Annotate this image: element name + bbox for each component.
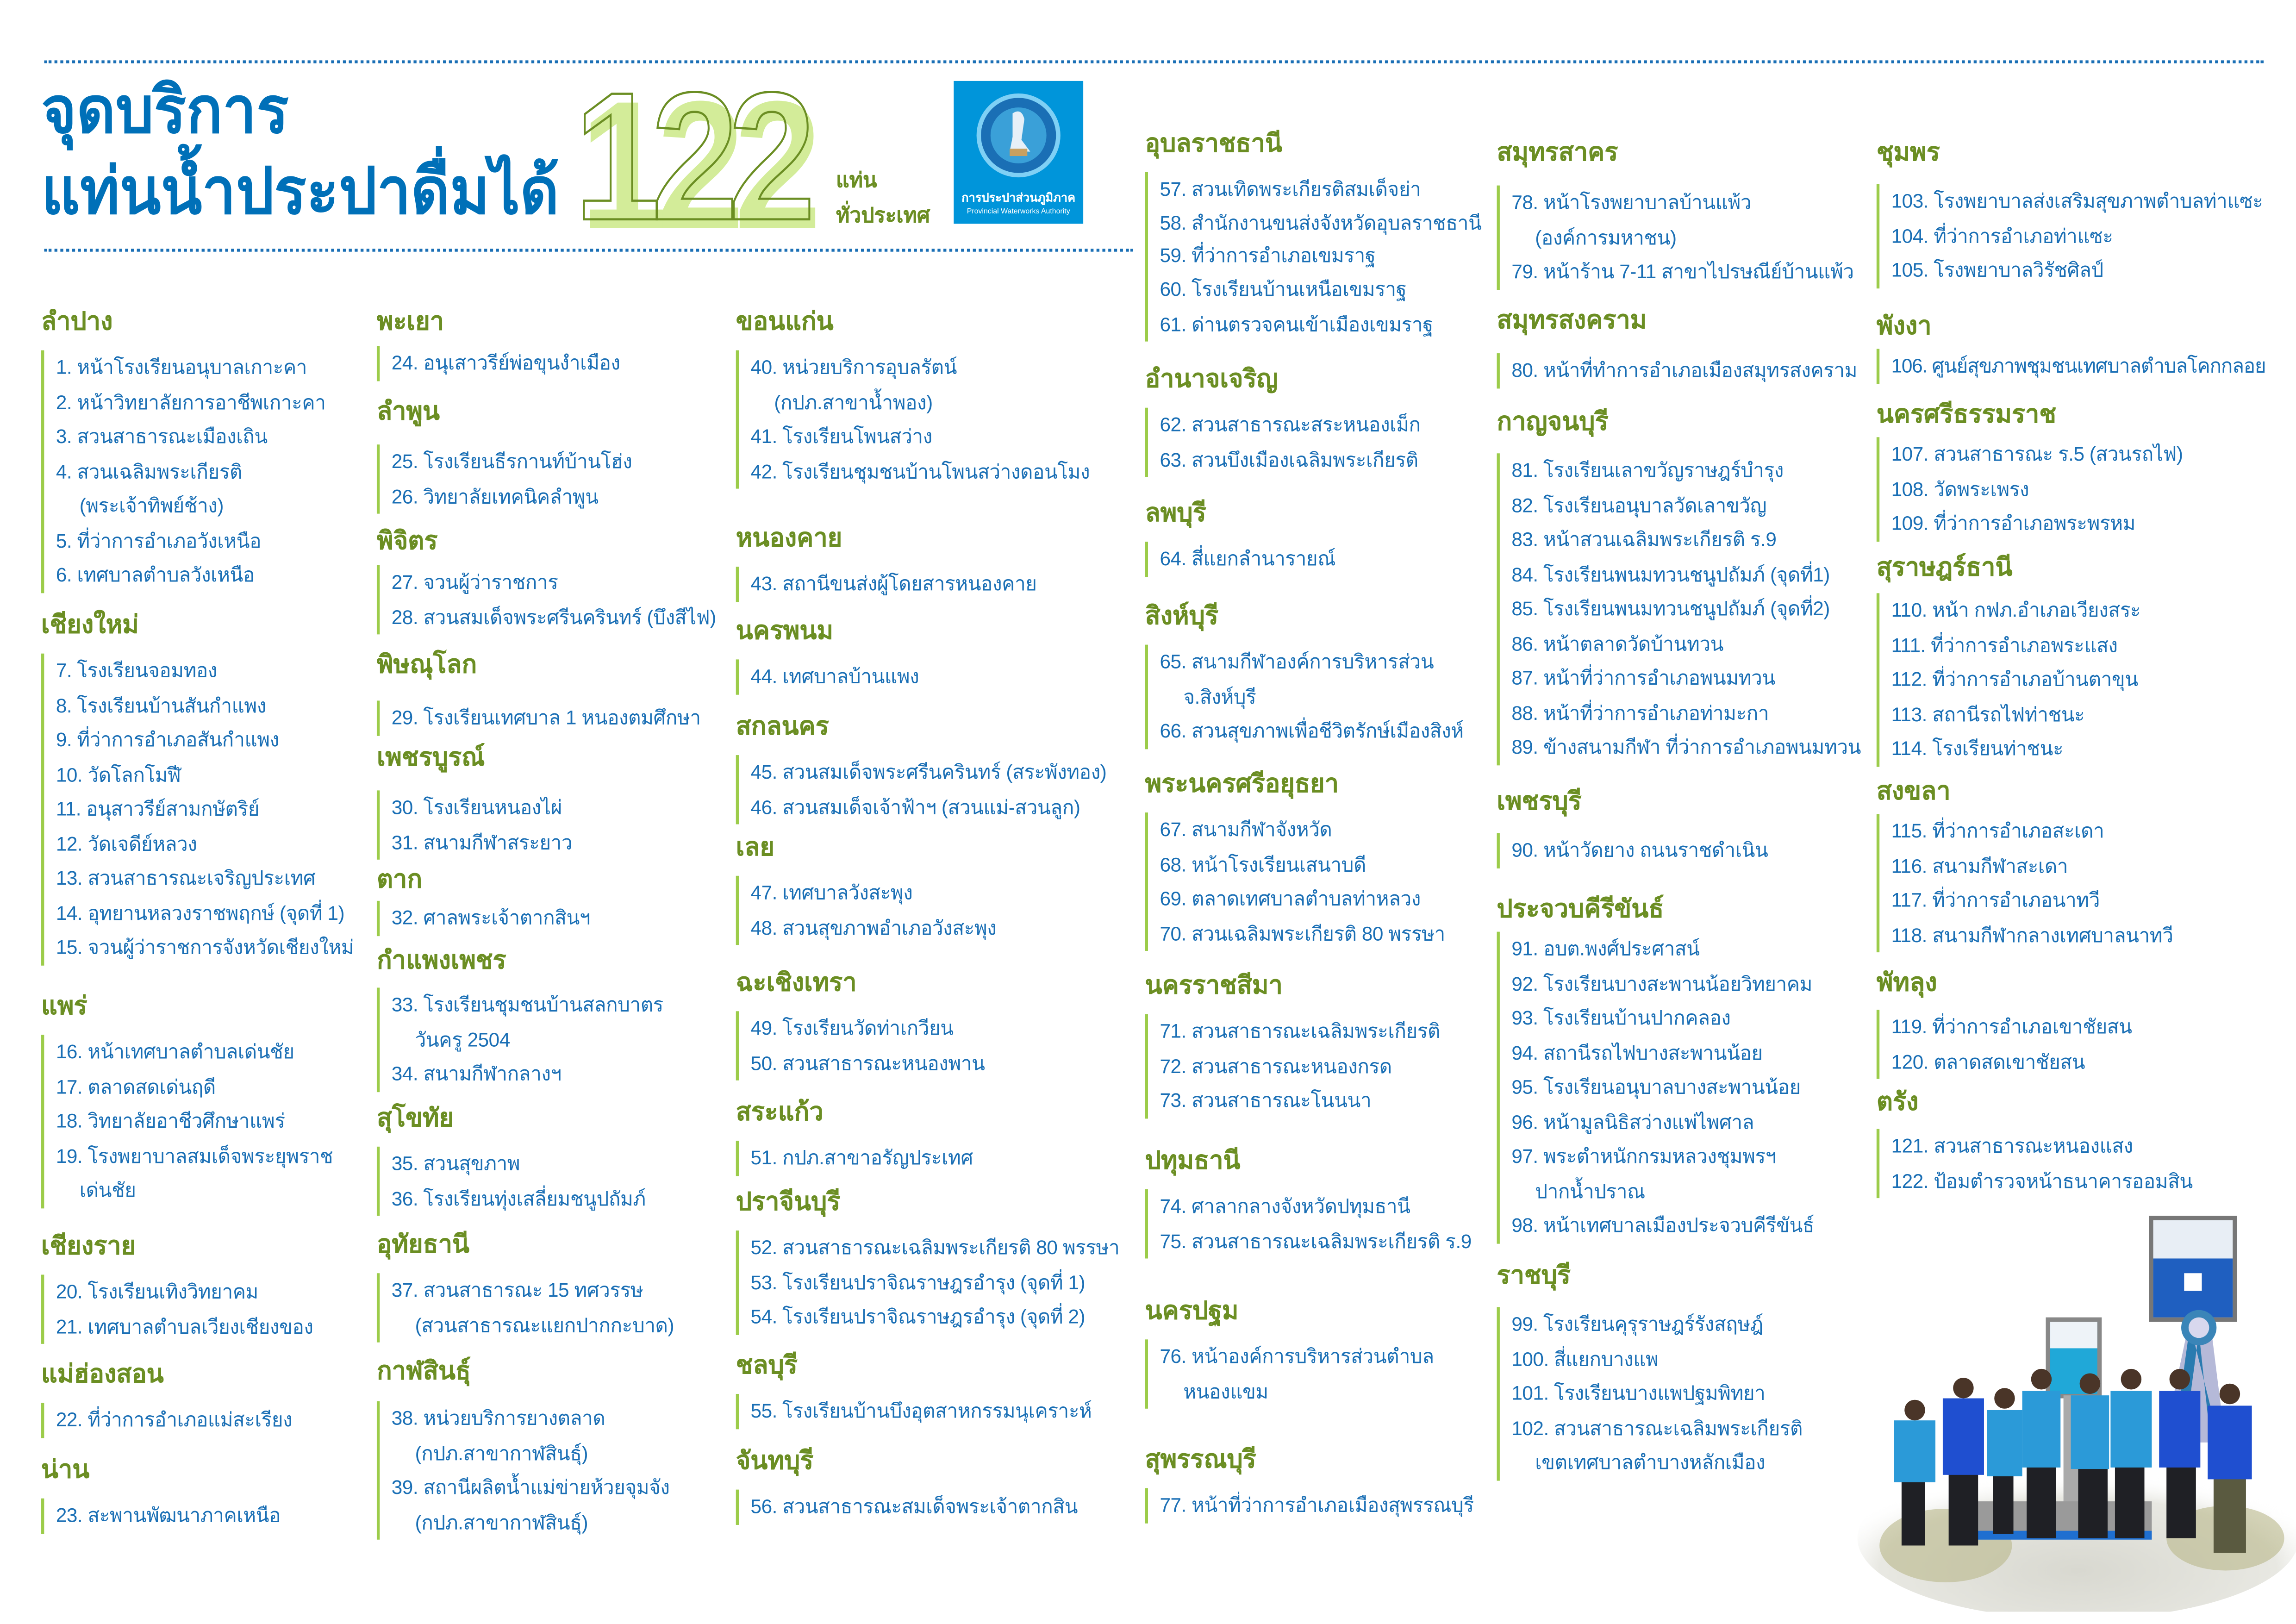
section: Samut Sakhon: [1497, 137, 1854, 289]
section: Amnat Charoen: อำนาจเจริญ: [1145, 365, 1278, 393]
section: Chanthaburi: [736, 1445, 1078, 1524]
section: Ayutthaya: 68. หน้าโรงเรียนเสนาบดี: [1160, 853, 1366, 875]
section: Trang: ตรัง: [1877, 1088, 1918, 1116]
section: Prachuap Khiri Khan: ประจวบคีรีขันธ์: [1497, 895, 1664, 923]
section: Lamphun: 25. โรงเรียนธีรกานท์บ้านโฮ่ง: [392, 450, 632, 473]
section: Nakhon Pathom: 76. หน้าองค์การบริหารส่วนตำบล: [1160, 1345, 1434, 1368]
section: Phang Nga: พังงา: [1877, 312, 1932, 340]
section: Suphan Buri: 77. หน้าที่ว่าการอำเภอเมืองสุพรรณบุรี: [1160, 1494, 1474, 1516]
section: Nakhon Si Thammarat: [1877, 399, 2183, 541]
section: Nan: 23. สะพานพัฒนาภาคเหนือ: [56, 1504, 281, 1526]
section: Chiang Rai: [41, 1230, 313, 1344]
section: Khon Kaen: (กปภ.สาขาน้ำพอง): [774, 391, 933, 413]
section: Phichit: 28. สวนสมเด็จพระศรีนครินทร์ (บึงสีไฟ): [392, 606, 716, 628]
section: Sing Buri: 66. สวนสุขภาพเพื่อชีวิตรักษ์เมืองสิงห์: [1160, 720, 1464, 742]
logo: PWA: การประปาส่วนภูมิภาค: [961, 191, 1075, 205]
section: Nakhon Si Thammarat: 109. ที่ว่าการอำเภอพระพรหม: [1891, 512, 2135, 534]
section: Kanchanaburi: 87. หน้าที่ว่าการอำเภอพนมทวน: [1511, 667, 1775, 689]
section: Samut Songkhram: สมุทรสงคราม: [1497, 306, 1647, 334]
section: Kalasin: 38. หน่วยบริการยางตลาด: [392, 1407, 605, 1429]
section: Chumphon: 104. ที่ว่าการอำเภอท่าแซะ: [1891, 225, 2113, 247]
section: Phrae: 16. หน้าเทศบาลตำบลเด่นชัย: [56, 1041, 294, 1063]
section: Loei: 47. เทศบาลวังสะพุง: [751, 882, 912, 904]
section: Chiang Mai: 11. อนุสาวรีย์สามกษัตริย์: [56, 798, 259, 820]
section: Nong Khai: หนองคาย: [736, 524, 842, 552]
section: Phitsanulok: [377, 649, 701, 735]
section: Chon Buri: [736, 1350, 1092, 1429]
section: Prachuap Khiri Khan: 97. พระตำหนักกรมหลวงชุมพรฯ: [1511, 1145, 1776, 1167]
section: Kamphaeng Phet: วันครู 2504: [415, 1028, 510, 1050]
section: Nakhon Ratchasima: 72. สวนสาธารณะหนองกรด: [1160, 1055, 1392, 1077]
section: Khon Kaen: 42. โรงเรียนชุมชนบ้านโพนสว่างดอนโมง: [751, 460, 1090, 482]
section: Lampang: 1. หน้าโรงเรียนอนุบาลเกาะคา: [56, 356, 307, 378]
section: Sing Buri: [1145, 600, 1464, 749]
section: Surat Thani: [1877, 552, 2140, 766]
section: Chiang Mai: เชียงใหม่: [41, 611, 139, 639]
section: Sukhothai: [377, 1102, 646, 1216]
section: Sakon Nakhon: สกลนคร: [736, 712, 829, 740]
section: Prachuap Khiri Khan: ปากน้ำปราณ: [1535, 1180, 1645, 1202]
section: Pathum Thani: ปทุมธานี: [1145, 1147, 1241, 1174]
section: Sa Kaeo: สระแก้ว: [736, 1098, 824, 1126]
section: Nakhon Ratchasima: 71. สวนสาธารณะเฉลิมพระเกียรติ: [1160, 1020, 1440, 1042]
section: Prachuap Khiri Khan: 93. โรงเรียนบ้านปากคลอง: [1511, 1007, 1731, 1029]
section: Nakhon Si Thammarat: 107. สวนสาธารณะ ร.5 (สวนรถไฟ): [1891, 443, 2183, 465]
section: Phatthalung: 119. ที่ว่าการอำเภอเขาชัยสน: [1891, 1016, 2132, 1038]
section: Chachoengsao: [736, 967, 985, 1081]
section: Kanchanaburi: 81. โรงเรียนเลาขวัญราษฎร์บำรุง: [1511, 459, 1784, 481]
section: Ubon Ratchathani: 58. สำนักงานขนส่งจังหวัดอุบลราชธานี: [1160, 211, 1481, 233]
section: Phetchabun: 30. โรงเรียนหนองไผ่: [392, 796, 562, 818]
section: Kalasin: กาฬสินธุ์: [377, 1357, 471, 1385]
section: Phrae: 17. ตลาดสดเด่นฤดี: [56, 1075, 216, 1097]
section: Phichit: 27. จวนผู้ว่าราชการ: [392, 571, 558, 593]
section: Surat Thani: 111. ที่ว่าการอำเภอพระแสง: [1891, 634, 2118, 656]
section: Phang Nga: [1877, 311, 2265, 383]
section: Sukhothai: สุโขทัย: [377, 1104, 454, 1132]
section: Loei: เลย: [736, 833, 774, 861]
section: Lop Buri: 64. สี่แยกลำนารายณ์: [1160, 548, 1335, 569]
section: Ratchaburi: 101. โรงเรียนบางแพปฐมพิทยา: [1511, 1382, 1765, 1404]
section: Chumphon: ชุมพร: [1877, 138, 1940, 166]
section: Mae Hong Son: แม่ฮ่องสอน: [41, 1360, 164, 1388]
section: Prachin Buri: ปราจีนบุรี: [736, 1188, 840, 1216]
section: Kanchanaburi: 82. โรงเรียนอนุบาลวัดเลาขวัญ: [1511, 494, 1766, 516]
section: Kamphaeng Phet: [377, 945, 663, 1092]
title: [41, 74, 534, 243]
section: Amnat Charoen: 63. สวนบึงเมืองเฉลิมพระเกียรติ: [1160, 448, 1418, 470]
section: Lampang: ลำปาง: [41, 308, 113, 336]
section: Phrae: 19. โรงพยาบาลสมเด็จพระยุพราช: [56, 1144, 333, 1167]
section: Ubon Ratchathani: 57. สวนเทิดพระเกียรติสมเด็จย่า: [1160, 178, 1421, 200]
section: Nakhon Ratchasima: นครราชสีมา: [1145, 971, 1283, 999]
section: Ubon Ratchathani: 60. โรงเรียนบ้านเหนือเขมราฐ: [1160, 278, 1406, 300]
section: Lampang: [41, 306, 326, 593]
section: Ratchaburi: 102. สวนสาธารณะเฉลิมพระเกียรติ: [1511, 1417, 1803, 1439]
section: Nakhon Phanom: [736, 615, 919, 694]
section: Phatthalung: [1877, 967, 2132, 1079]
section: Chiang Rai: 21. เทศบาลตำบลเวียงเชียงของ: [56, 1315, 313, 1337]
title: จุดบริการ: [41, 75, 289, 147]
subtitle: units nationwide: [836, 162, 946, 236]
section: Chon Buri: ชลบุรี: [736, 1351, 798, 1379]
section: Lampang: 6. เทศบาลตำบลวังเหนือ: [56, 564, 255, 586]
section: Uthai Thani: 37. สวนสาธารณะ 15 ทศวรรษ: [392, 1279, 643, 1301]
section: Sing Buri: 65. สนามกีฬาองค์การบริหารส่วน: [1160, 650, 1434, 673]
section: Surat Thani: 113. สถานีรถไฟท่าชนะ: [1891, 703, 2084, 725]
section: Ratchaburi: เขตเทศบาลตำบางหลักเมือง: [1535, 1451, 1765, 1474]
section: Chachoengsao: 49. โรงเรียนวัดท่าเกวียน: [751, 1017, 954, 1039]
section: Lamphun: 26. วิทยาลัยเทคนิคลำพูน: [392, 485, 599, 507]
section: Amnat Charoen: [1145, 363, 1421, 477]
section: Songkhla: 116. สนามกีฬาสะเดา: [1891, 855, 2068, 876]
section: Surat Thani: 114. โรงเรียนท่าชนะ: [1891, 737, 2063, 760]
section: Ratchaburi: ราชบุรี: [1497, 1262, 1571, 1289]
photo: staff drinking at water station: [1858, 1207, 2296, 1612]
section: Songkhla: [1877, 776, 2173, 952]
logo: PWA: [954, 81, 1083, 224]
section: Ratchaburi: 99. โรงเรียนคุรุราษฎร์รังสฤษฎ์: [1511, 1313, 1763, 1335]
section: Kalasin: 39. สถานีผลิตน้ำแม่ข่ายห้วยจุมจัง: [392, 1476, 670, 1499]
section: Phayao: [377, 306, 620, 381]
section: Ayutthaya: พระนครศรีอยุธยา: [1145, 770, 1339, 798]
section: Chachoengsao: ฉะเชิงเทรา: [736, 968, 857, 997]
section: Ratchaburi: 100. สี่แยกบางแพ: [1511, 1348, 1658, 1370]
section: Kalasin: [377, 1355, 670, 1540]
section: Prachin Buri: [736, 1187, 1119, 1334]
section: Mae Hong Son: 22. ที่ว่าการอำเภอแม่สะเรียง: [56, 1409, 292, 1430]
section: Samut Songkhram: 80. หน้าที่ทำการอำเภอเมืองสมุทรสงคราม: [1511, 359, 1857, 381]
section: Prachuap Khiri Khan: 96. หน้ามูลนิธิสว่างแพ่ไพศาล: [1511, 1111, 1754, 1133]
section: Trang: 121. สวนสาธารณะหนองแสง: [1891, 1135, 2133, 1157]
section: Nan: [41, 1454, 281, 1533]
section: Kanchanaburi: 85. โรงเรียนพนมทวนชนูปถัมภ์ (จุดที่2): [1511, 598, 1830, 620]
section: Kanchanaburi: 88. หน้าที่ว่าการอำเภอท่ามะกา: [1511, 701, 1769, 724]
section: Uthai Thani: อุทัยธานี: [377, 1230, 469, 1258]
section: Chumphon: 105. โรงพยาบาลวิรัชศิลป์: [1891, 259, 2103, 281]
section: Ratchaburi: [1497, 1260, 1803, 1480]
section: Surat Thani: 110. หน้า กฟภ.อำเภอเวียงสระ: [1891, 599, 2140, 621]
section: Lampang: 2. หน้าวิทยาลัยการอาชีพเกาะคา: [56, 391, 326, 413]
section: Chiang Mai: 7. โรงเรียนจอมทอง: [56, 659, 217, 681]
section: Ayutthaya: [1145, 768, 1445, 951]
section: Ubon Ratchathani: 61. ด่านตรวจคนเข้าเมืองเขมราฐ: [1160, 313, 1433, 335]
section: Suphan Buri: สุพรรณบุรี: [1145, 1445, 1256, 1474]
section: Sing Buri: จ.สิงห์บุรี: [1183, 685, 1256, 707]
section: Pathum Thani: 75. สวนสาธารณะเฉลิมพระเกียรติ ร.9: [1160, 1230, 1472, 1252]
section: Kalasin: (กปภ.สาขากาฬสินธุ์): [415, 1511, 588, 1533]
section: Kanchanaburi: [1497, 406, 1861, 765]
section: Prachuap Khiri Khan: 91. อบต.พงศ์ประศาสน์: [1511, 937, 1700, 960]
section: Prachin Buri: 52. สวนสาธารณะเฉลิมพระเกียรติ 80 พรรษา: [751, 1237, 1119, 1258]
big number 122: 122: [580, 65, 811, 268]
section: Nakhon Si Thammarat: 108. วัดพระเพรง: [1891, 478, 2029, 500]
section: Prachuap Khiri Khan: 98. หน้าเทศบาลเมืองประจวบคีรีขันธ์: [1511, 1214, 1814, 1237]
section: Phatthalung: พัทลุง: [1877, 968, 1937, 997]
section: Kanchanaburi: 89. ข้างสนามกีฬา ที่ว่าการอำเภอพนมทวน: [1511, 736, 1861, 758]
section: Ayutthaya: 69. ตลาดเทศบาลตำบลท่าหลวง: [1160, 887, 1421, 910]
section: Chon Buri: 55. โรงเรียนบ้านบึงอุตสาหกรรมนุเคราะห์: [751, 1400, 1092, 1422]
section: Nong Khai: 43. สถานีขนส่งผู้โดยสารหนองคาย: [751, 573, 1037, 595]
section: Phichit: พิจิตร: [377, 527, 437, 555]
section: Phetchabun: [377, 742, 572, 860]
section: Chiang Mai: 13. สวนสาธารณะเจริญประเทศ: [56, 867, 315, 889]
section: Phetchaburi: 90. หน้าวัดยาง ถนนราชดำเนิน: [1511, 839, 1768, 861]
subtitle: units nationwide: ทั่วประเทศ: [836, 203, 930, 227]
logo: PWA: Provincial Waterworks Authority: [967, 207, 1070, 216]
section: Phrae: เด่นชัย: [80, 1179, 136, 1201]
section: Samut Songkhram: [1497, 305, 1857, 388]
section: Kamphaeng Phet: 33. โรงเรียนชุมชนบ้านสลกบาตร: [392, 993, 663, 1016]
section: Nakhon Ratchasima: 73. สวนสาธารณะโนนนา: [1160, 1089, 1371, 1112]
section: Nakhon Pathom: นครปฐม: [1145, 1297, 1239, 1325]
section: Nakhon Pathom: [1145, 1295, 1434, 1409]
section: Lampang: 3. สวนสาธารณะเมืองเถิน: [56, 425, 268, 448]
section: Samut Sakhon: (องค์การมหาชน): [1535, 226, 1677, 248]
section: Sakon Nakhon: 45. สวนสมเด็จพระศรีนครินทร์ (สระพังทอง): [751, 761, 1106, 783]
section: Prachin Buri: 54. โรงเรียนปราจิณราษฎรอำรุง (จุดที่ 2): [751, 1305, 1085, 1328]
section: Chiang Rai: เชียงราย: [41, 1232, 136, 1260]
section: Sukhothai: 35. สวนสุขภาพ: [392, 1153, 520, 1174]
section: Uthai Thani: (สวนสาธารณะแยกปากกะบาด): [415, 1314, 674, 1336]
section: Kamphaeng Phet: 34. สนามกีฬากลางฯ: [392, 1063, 562, 1085]
section: Tak: 32. ศาลพระเจ้าตากสินฯ: [392, 907, 590, 929]
section: Sukhothai: 36. โรงเรียนทุ่งเสลี่ยมชนูปถัมภ์: [392, 1187, 646, 1209]
section: Prachuap Khiri Khan: [1497, 893, 1814, 1243]
section: Nan: น่าน: [41, 1456, 89, 1484]
section: Chanthaburi: จันทบุรี: [736, 1447, 813, 1475]
section: Trang: [1877, 1086, 2193, 1198]
section: Lop Buri: [1145, 498, 1335, 576]
section: Phrae: 18. วิทยาลัยอาชีวศึกษาแพร่: [56, 1110, 285, 1132]
section: Chiang Mai: [41, 609, 354, 965]
section: Lampang: 5. ที่ว่าการอำเภอวังเหนือ: [56, 529, 261, 551]
section: Nong Khai: [736, 523, 1037, 601]
section: Ubon Ratchathani: [1145, 128, 1481, 342]
section: Trang: 122. ป้อมตำรวจหน้าธนาคารออมสิน: [1891, 1169, 2193, 1192]
section: Phetchabun: เพชรบูรณ์: [377, 743, 485, 771]
section: Sing Buri: สิงห์บุรี: [1145, 602, 1218, 630]
section: Phitsanulok: พิษณุโลก: [377, 650, 477, 679]
section: Chiang Mai: 12. วัดเจดีย์หลวง: [56, 832, 197, 855]
section: Kanchanaburi: 84. โรงเรียนพนมทวนชนูปถัมภ์ (จุดที่1): [1511, 563, 1830, 585]
section: Surat Thani: สุราษฎร์ธานี: [1877, 553, 2013, 581]
section: Pathum Thani: 74. ศาลากลางจังหวัดปทุมธานี: [1160, 1195, 1410, 1217]
section: Phetchabun: 31. สนามกีฬาสระยาว: [392, 831, 572, 853]
section: Chiang Mai: 10. วัดโลกโมฬี: [56, 763, 181, 785]
section: Chiang Mai: 14. อุทยานหลวงราชพฤกษ์ (จุดที่ 1): [56, 901, 344, 924]
section: Lampang: 4. สวนเฉลิมพระเกียรติ: [56, 460, 242, 482]
section: Surat Thani: 112. ที่ว่าการอำเภอบ้านตาขุน: [1891, 668, 2138, 690]
section: Tak: [377, 864, 590, 936]
section: Suphan Buri: [1145, 1444, 1474, 1523]
section: Songkhla: สงขลา: [1877, 777, 1951, 805]
section: Nakhon Phanom: 44. เทศบาลบ้านแพง: [751, 665, 919, 687]
section: Phayao: พะเยา: [377, 308, 444, 336]
section: Phrae: แพร่: [41, 992, 87, 1020]
section: Sakon Nakhon: [736, 711, 1106, 824]
section: Phrae: [41, 991, 333, 1208]
section: Khon Kaen: [736, 306, 1090, 489]
section: Phayao: 24. อนุเสาวรีย์พ่อขุนงำเมือง: [392, 352, 620, 374]
section: Ubon Ratchathani: 59. ที่ว่าการอำเภอเขมราฐ: [1160, 244, 1376, 266]
section: Chumphon: 103. โรงพยาบาลส่งเสริมสุขภาพตำบลท่าแซะ: [1891, 190, 2263, 212]
section: Lamphun: [377, 396, 632, 514]
section: Kanchanaburi: 83. หน้าสวนเฉลิมพระเกียรติ ร.9: [1511, 528, 1776, 550]
section: Ayutthaya: 70. สวนเฉลิมพระเกียรติ 80 พรรษา: [1160, 922, 1445, 944]
section: Khon Kaen: 41. โรงเรียนโพนสว่าง: [751, 425, 932, 448]
section: Chiang Mai: 15. จวนผู้ว่าราชการจังหวัดเชียงใหม่: [56, 936, 354, 958]
section: Khon Kaen: ขอนแก่น: [736, 308, 834, 336]
section: Samut Sakhon: 78. หน้าโรงพยาบาลบ้านแพ้ว: [1511, 191, 1751, 213]
section: Amnat Charoen: 62. สวนสาธารณะสระหนองเม็ก: [1160, 413, 1421, 436]
section: Chumphon: [1877, 137, 2263, 288]
section: Phetchaburi: เพชรบุรี: [1497, 787, 1582, 815]
section: Khon Kaen: 40. หน่วยบริการอุบลรัตน์: [751, 356, 957, 378]
section: Songkhla: 115. ที่ว่าการอำเภอสะเดา: [1891, 820, 2104, 842]
section: Prachuap Khiri Khan: 95. โรงเรียนอนุบาลบางสะพานน้อย: [1511, 1076, 1801, 1098]
section: Phichit: [377, 525, 716, 634]
section: Songkhla: 117. ที่ว่าการอำเภอนาทวี: [1891, 889, 2100, 911]
section: Pathum Thani: [1145, 1145, 1472, 1258]
section: Mae Hong Son: [41, 1359, 292, 1437]
section: Kanchanaburi: 86. หน้าตลาดวัดบ้านทวน: [1511, 632, 1723, 654]
section: Chachoengsao: 50. สวนสาธารณะหนองพาน: [751, 1052, 985, 1074]
section: Prachuap Khiri Khan: 94. สถานีรถไฟบางสะพานน้อย: [1511, 1041, 1763, 1063]
section: Kanchanaburi: กาญจนบุรี: [1497, 408, 1609, 436]
section: Loei: 48. สวนสุขภาพอำเภอวังสะพุง: [751, 916, 996, 938]
section: Samut Sakhon: สมุทรสาคร: [1497, 138, 1618, 166]
section: Nakhon Ratchasima: [1145, 970, 1440, 1118]
section: Chiang Mai: 8. โรงเรียนบ้านสันกำแพง: [56, 694, 266, 716]
section: Nakhon Si Thammarat: นครศรีธรรมราช: [1877, 400, 2056, 428]
section: Loei: [736, 831, 996, 945]
section: Nakhon Phanom: นครพนม: [736, 617, 833, 645]
section: Songkhla: 118. สนามกีฬากลางเทศบาลนาทวี: [1891, 924, 2173, 946]
section: Ayutthaya: 67. สนามกีฬาจังหวัด: [1160, 818, 1332, 840]
section: Samut Sakhon: 79. หน้าร้าน 7-11 สาขาไปรษณีย์บ้านแพ้ว: [1511, 261, 1854, 282]
section: Tak: ตาก: [377, 866, 422, 893]
section: Lampang: (พระเจ้าทิพย์ช้าง): [80, 494, 224, 517]
section: Phetchaburi: [1497, 786, 1768, 868]
section: Uthai Thani: [377, 1229, 674, 1343]
section: Sa Kaeo: 51. กปภ.สาขาอรัญประเทศ: [751, 1147, 973, 1169]
section: Chiang Mai: 9. ที่ว่าการอำเภอสันกำแพง: [56, 729, 279, 751]
section: Phatthalung: 120. ตลาดสดเขาชัยสน: [1891, 1050, 2085, 1072]
subtitle: units nationwide: แท่น: [836, 168, 877, 191]
section: Prachuap Khiri Khan: 92. โรงเรียนบางสะพานน้อยวิทยาคม: [1511, 972, 1812, 994]
section: Sa Kaeo: [736, 1097, 973, 1175]
section: Chiang Rai: 20. โรงเรียนเทิงวิทยาคม: [56, 1280, 258, 1303]
section: Chanthaburi: 56. สวนสาธารณะสมเด็จพระเจ้าตากสิน: [751, 1495, 1078, 1518]
section: Lamphun: ลำพูน: [377, 397, 440, 425]
section: Ubon Ratchathani: อุบลราชธานี: [1145, 130, 1282, 157]
section: Sakon Nakhon: 46. สวนสมเด็จเจ้าฟ้าฯ (สวนแม่-สวนลูก): [751, 796, 1080, 818]
section: Lop Buri: ลพบุรี: [1145, 499, 1206, 527]
section: Phitsanulok: 29. โรงเรียนเทศบาล 1 หนองตมศึกษา: [392, 706, 701, 729]
title: แท่นน้ำประปาดื่มได้: [41, 156, 559, 228]
section: Nakhon Pathom: หนองแขม: [1183, 1380, 1268, 1402]
section: Prachin Buri: 53. โรงเรียนปราจิณราษฎรอำรุง (จุดที่ 1): [751, 1271, 1085, 1293]
section: Kalasin: (กปภ.สาขากาฬสินธุ์): [415, 1442, 588, 1464]
section: Phang Nga: 106. ศูนย์สุขภาพชุมชนเทศบาลตำบลโคกกลอย: [1891, 355, 2265, 377]
section: Kamphaeng Phet: กำแพงเพชร: [377, 946, 506, 974]
